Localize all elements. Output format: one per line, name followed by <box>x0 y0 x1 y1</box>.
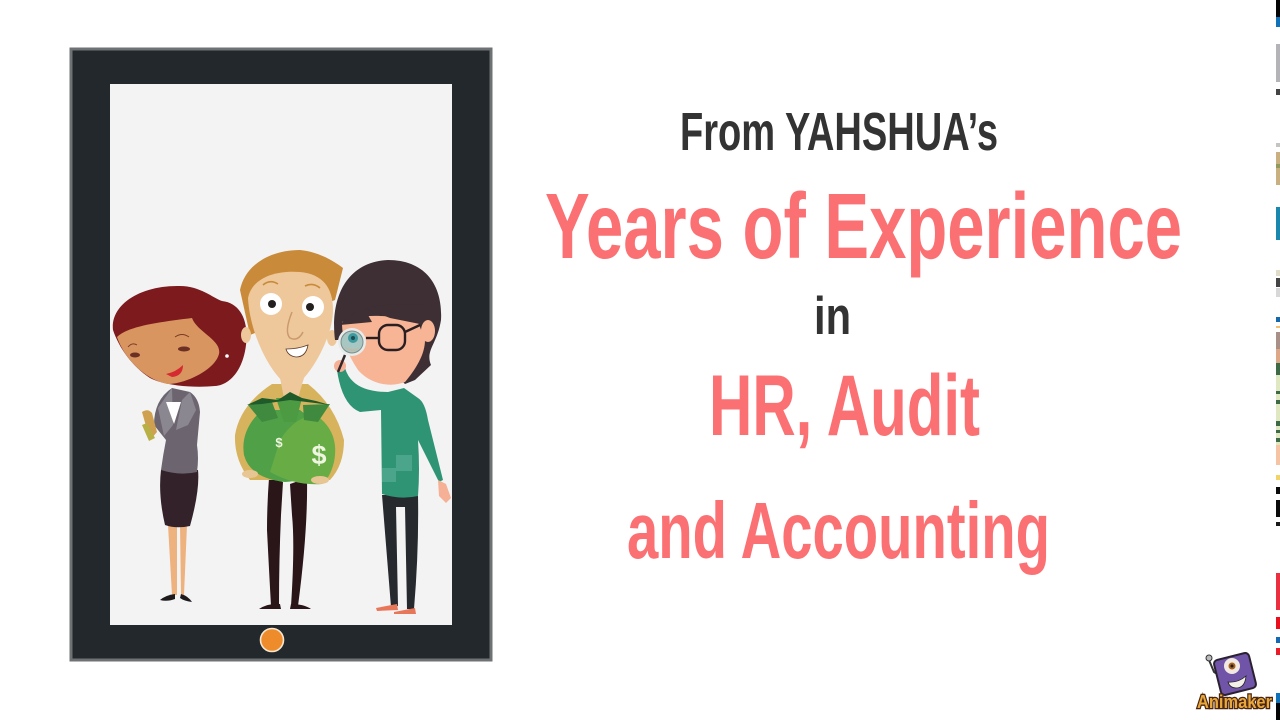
woman face <box>117 318 219 384</box>
money bags: $ <box>275 435 283 450</box>
edge strip: next video thumbnails <box>1276 0 1280 720</box>
tablet screen <box>110 84 452 625</box>
money bags: $ <box>311 440 327 470</box>
man neck <box>280 378 304 398</box>
mascot eye <box>1224 658 1240 674</box>
woman legs and shoes <box>160 525 192 602</box>
man face <box>248 272 333 386</box>
mascot body <box>1213 652 1257 696</box>
heading: HR, Audit: HR, Audit <box>709 358 980 454</box>
person trousers <box>382 495 418 609</box>
person fringe <box>340 305 432 325</box>
woman facial features <box>128 334 229 377</box>
woman jacket <box>142 388 200 474</box>
man nose and smile <box>286 312 308 357</box>
man legs <box>259 478 311 609</box>
person sweater <box>337 368 443 498</box>
person hair <box>334 260 441 384</box>
logo: Animaker mascot <box>1197 652 1272 712</box>
woman skirt <box>160 470 198 527</box>
person face <box>342 316 425 385</box>
illustration: woman in grey suit <box>113 286 247 602</box>
money bags <box>243 392 335 484</box>
man hands <box>242 470 329 484</box>
heading: and Accounting: and Accounting <box>627 486 1050 575</box>
icon: tablet home button <box>260 628 284 652</box>
person ear <box>421 320 435 342</box>
logo wordmark: Animaker <box>1197 692 1272 712</box>
man ears <box>241 327 337 346</box>
woman hair <box>113 286 247 387</box>
man eyes <box>260 282 324 318</box>
mascot antenna <box>1209 660 1220 676</box>
illustration: person with magnifying glass <box>334 260 451 614</box>
heading: in: in <box>814 287 851 346</box>
person glasses <box>366 325 420 350</box>
icon: magnifying glass <box>338 328 366 372</box>
panel: tablet device <box>71 49 491 660</box>
heading: From YAHSHUA's: From YAHSHUA’s <box>680 102 998 162</box>
person hand <box>334 360 451 503</box>
mascot mouth <box>1228 676 1246 688</box>
illustration: man holding money bags <box>235 250 344 609</box>
person shoes <box>376 604 416 614</box>
man hair back <box>240 250 343 335</box>
man jacket <box>235 384 344 480</box>
